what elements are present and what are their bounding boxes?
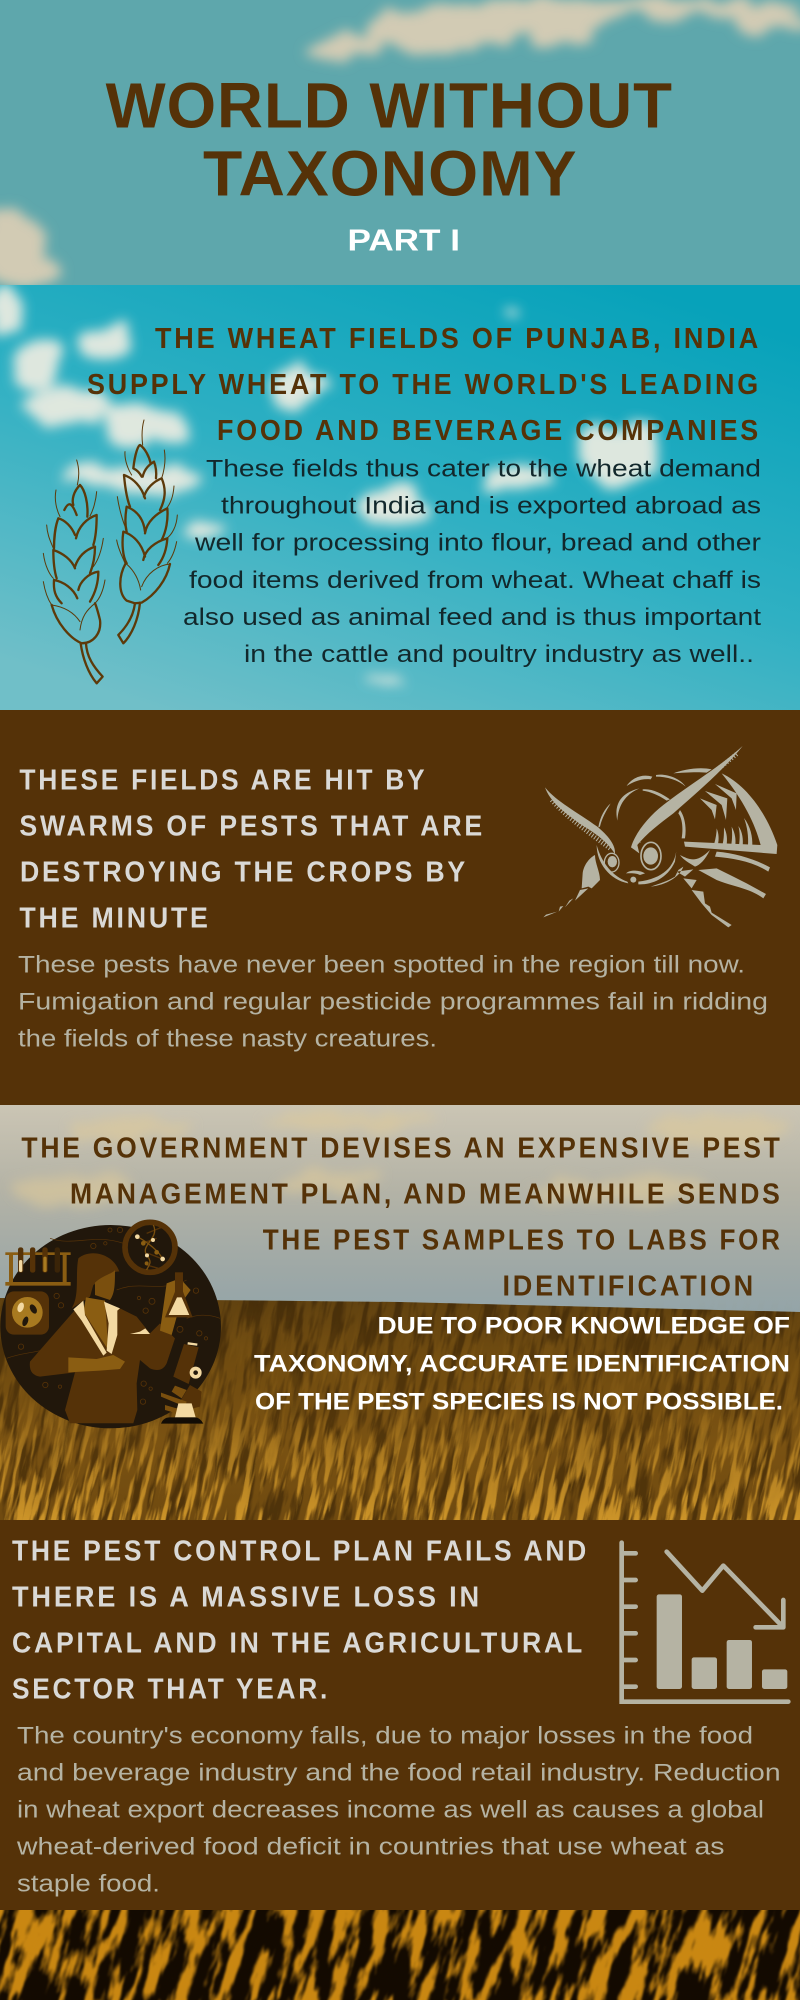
text block: pests description: Fumigation and regular pesticide programmes fail in ridding [18,988,768,1015]
text block: wheat demand: throughout India and is exported abroad as [221,493,761,520]
heading: title: WORLD WITHOUT [106,70,673,142]
panel: wheat fields of Punjab [0,284,800,710]
heading: pests [19,764,485,934]
heading: plan fails: THE PEST CONTROL PLAN FAILS AND [12,1536,589,1568]
text block: wheat demand: These fields thus cater to the wheat demand [206,455,761,482]
icon: falling bar chart [622,1543,788,1702]
heading: pests: DESTROYING THE CROPS BY [20,856,468,888]
heading: wheat fields: THE WHEAT FIELDS OF PUNJAB, INDIA [155,323,761,355]
icon: insect [543,746,777,927]
heading: wheat fields: FOOD AND BEVERAGE COMPANIES [217,415,761,447]
heading: plan fails: SECTOR THAT YEAR. [12,1674,330,1706]
text block: wheat demand: in the cattle and poultry industry as well.. [244,641,754,668]
text block: economy falls: and beverage industry and the food retail industry. Reduction [17,1760,781,1787]
text block: economy falls [16,1722,781,1897]
text block: economy falls: in wheat export decreases income as well as causes a global [17,1796,764,1823]
subtitle: part I: PART I [348,222,460,258]
panel: swarms of pests [0,710,800,1105]
heading: pests: SWARMS OF PESTS THAT ARE [19,810,485,842]
text block: poor knowledge of taxonomy: OF THE PEST SPECIES IS NOT POSSIBLE. [255,1388,783,1415]
text block: wheat demand [183,455,761,668]
text block: economy falls: The country's economy falls, due to major losses in the food [17,1722,753,1749]
heading: title [106,70,673,210]
heading: pests: THE MINUTE [19,902,211,934]
icon: wheat ears [43,420,177,683]
text block: poor knowledge of taxonomy: TAXONOMY, ACCURATE IDENTIFICATION [254,1351,790,1378]
heading: government plan [21,1132,783,1302]
text block: economy falls: staple food. [17,1870,160,1897]
text block: poor knowledge of taxonomy: DUE TO POOR KNOWLEDGE OF [378,1312,790,1339]
text block: pests description: the fields of these nasty creatures. [18,1026,437,1053]
heading: pests: THESE FIELDS ARE HIT BY [19,764,427,796]
icon: scientist [0,1222,221,1428]
panel: pest control plan fails [0,1520,800,1910]
panel: government pest plan [0,1105,800,1520]
heading: plan fails: THERE IS A MASSIVE LOSS IN [12,1582,482,1614]
heading: title: TAXONOMY [203,138,578,210]
text block: wheat demand: food items derived from wheat. Wheat chaff is [189,567,761,594]
text block: wheat demand: well for processing into flour, bread and other [194,530,761,557]
panel: wheat footer [0,1910,800,2000]
heading: plan fails: CAPITAL AND IN THE AGRICULTURAL [12,1628,585,1660]
text block: pests description [18,952,768,1053]
heading: government plan: IDENTIFICATION [502,1270,756,1302]
text block: wheat demand: also used as animal feed and is thus important [183,604,761,631]
heading: plan fails [12,1536,589,1706]
text block: economy falls: wheat-derived food deficit in countries that use wheat as [16,1833,724,1860]
panel: title band [0,0,800,285]
heading: wheat fields: SUPPLY WHEAT TO THE WORLD'S LEADING [87,369,761,401]
text block: pests description: These pests have never been spotted in the region till now. [18,952,745,979]
heading: wheat fields [87,323,761,447]
text block: poor knowledge of taxonomy [254,1312,790,1415]
